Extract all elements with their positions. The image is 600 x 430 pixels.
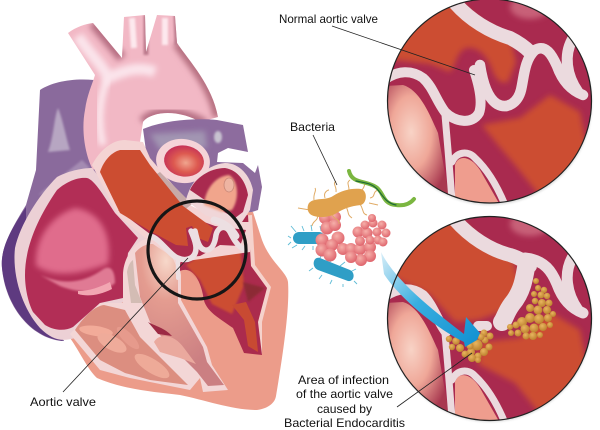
lower blood pool — [482, 95, 590, 196]
label: Aortic valve — [30, 258, 188, 409]
tricuspid chamber — [75, 305, 188, 385]
red coccus cluster — [316, 211, 390, 266]
dark valve gap — [148, 322, 172, 336]
label: Normal aortic valve: Normal aortic valve — [279, 12, 378, 26]
vegetation cluster: left — [446, 330, 494, 363]
blue bacterium left — [288, 225, 325, 250]
atrium wall tint — [508, 219, 546, 239]
atrium wall tint — [510, 0, 550, 19]
left lobe — [386, 302, 449, 415]
left ventricle chamber — [175, 215, 271, 355]
aortic trunk — [92, 140, 250, 262]
taupe wedge — [127, 260, 142, 303]
label: Bacteria — [290, 120, 337, 185]
label: Bacteria: Bacteria — [290, 120, 335, 134]
right atrium chamber — [14, 168, 150, 340]
vegetation cluster: right — [507, 278, 556, 340]
aorta — [68, 15, 218, 170]
upper blood pool — [398, 225, 517, 324]
ventricle and valve leaflets — [70, 238, 228, 392]
left lobe — [386, 85, 449, 197]
label: area of infection: of the aortic valve — [296, 387, 393, 401]
green spirillum bacterium — [349, 171, 414, 205]
damaged valve membrane — [384, 220, 583, 423]
oval vessel cross-section — [153, 135, 213, 187]
inset: normal aortic valve — [378, 0, 595, 208]
label: Aortic valve: Aortic valve — [30, 395, 96, 409]
lower lobe — [455, 158, 500, 205]
label: area of infection: Area of infection — [298, 373, 389, 387]
label: area of infection — [284, 353, 472, 430]
highlighted valve circle — [148, 201, 246, 299]
inset: infected aortic valve — [378, 210, 595, 425]
label: area of infection: Bacterial Endocarditis — [284, 416, 405, 430]
pale septal wall — [70, 238, 228, 392]
outflow lobe — [135, 244, 224, 386]
lower blood pool — [478, 312, 590, 414]
label: Normal aortic valve — [279, 12, 475, 75]
heart muscle body — [70, 212, 288, 410]
vena cava and outer right atrium wall — [2, 79, 112, 341]
heart illustration — [2, 15, 288, 410]
upper blood pool — [396, 8, 518, 84]
aortic valve leaflets — [150, 220, 245, 278]
blue bacterium lower — [309, 254, 357, 287]
valve membrane — [384, 3, 583, 205]
blue arrow — [381, 252, 480, 347]
second leaflet — [154, 336, 196, 364]
lower lobe — [455, 375, 498, 420]
bacteria group — [288, 171, 414, 287]
orange rod bacterium — [298, 180, 378, 226]
left atrium — [186, 163, 253, 228]
pulmonary vessels — [143, 119, 262, 225]
label: area of infection: caused by — [317, 402, 372, 416]
